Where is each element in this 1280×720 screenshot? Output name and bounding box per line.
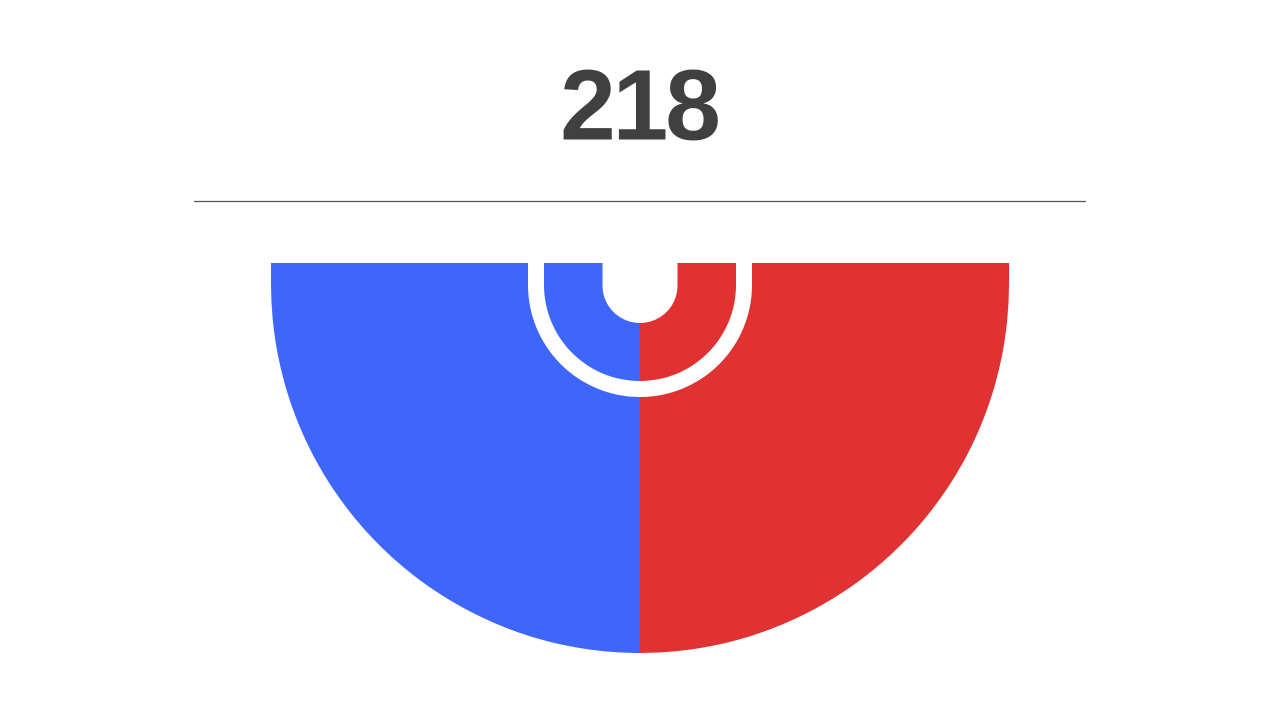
title: total number: 218 [560,50,718,162]
outer segment: red [640,263,1009,653]
chart: half-donut split in two segments [271,262,1009,653]
outer segment: blue [271,263,640,653]
white ring separator [528,263,752,397]
center cutout [602,262,678,323]
